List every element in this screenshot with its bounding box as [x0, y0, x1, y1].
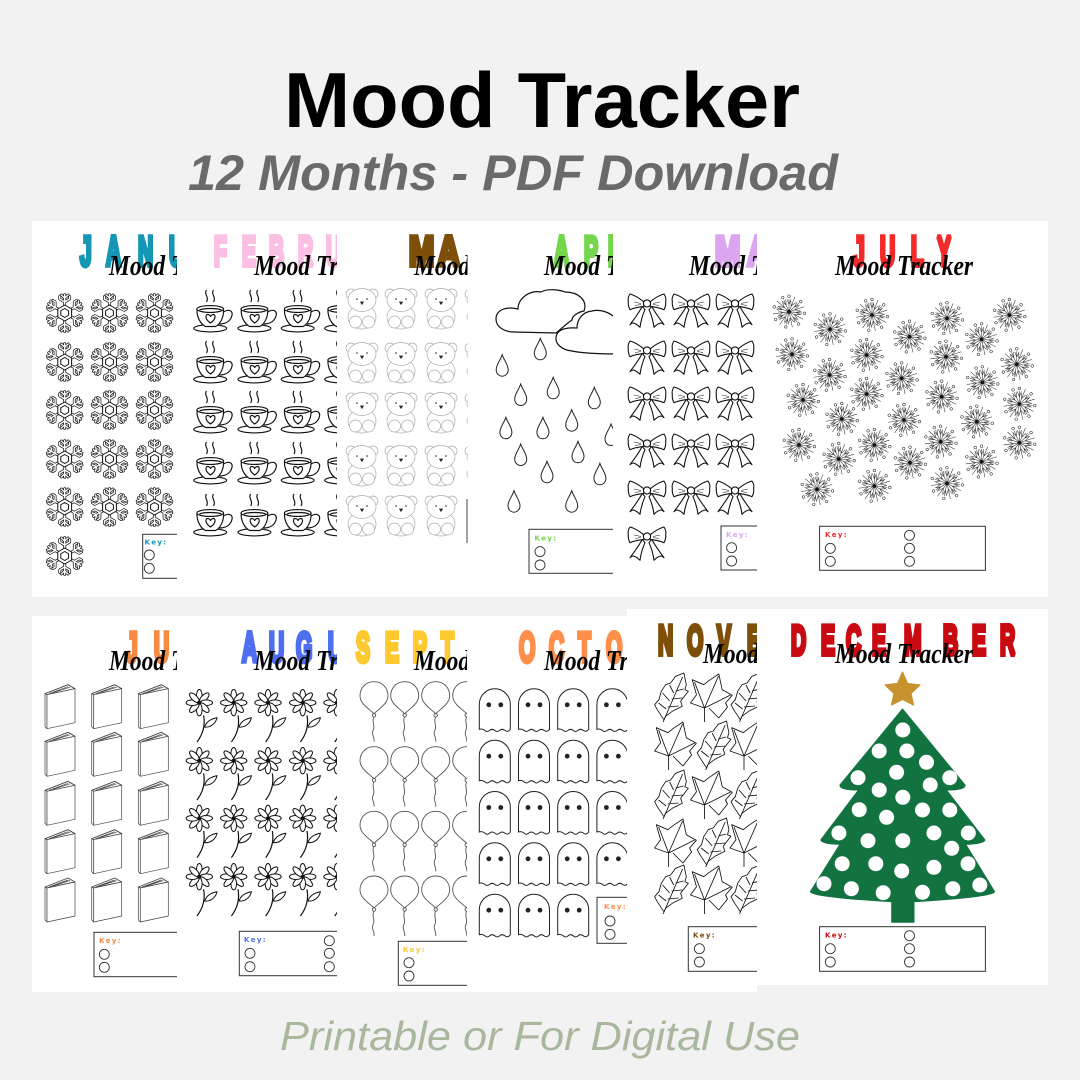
script title: Mood Tracker: [253, 251, 393, 282]
key box: Key:: [144, 538, 168, 546]
icons: balloons: [360, 682, 481, 936]
panel: June: [44, 630, 177, 978]
key box: Key:: [604, 903, 627, 911]
heading: October: OCTOBER: [519, 625, 710, 672]
panel: September: [355, 630, 467, 986]
footer tagline: Printable or For Digital Use: [280, 1013, 800, 1059]
heading: August: AUGUST: [242, 625, 403, 672]
icons: snowflakes: [46, 294, 173, 574]
panel: January: [46, 234, 177, 579]
title: Mood Tracker: [284, 56, 800, 144]
script title: Mood Tracker: [108, 251, 248, 282]
key box: [688, 927, 854, 971]
heading: June: JUNE: [126, 625, 227, 672]
icons: flowers: [186, 690, 355, 916]
script title: Mood Tracker: [834, 639, 974, 670]
key box: Key:: [693, 932, 716, 940]
icons: fireworks: [772, 295, 1036, 506]
illustration: Christmas tree: [810, 709, 995, 922]
icons: teddy bears: [346, 288, 468, 536]
key box: [94, 932, 177, 978]
heading: November: NOVEMBER: [658, 618, 880, 665]
panel: March: [346, 234, 468, 543]
key box: [238, 930, 337, 976]
heading: May: MAY: [715, 228, 798, 275]
panel: August: [186, 630, 337, 976]
key box: [720, 526, 757, 570]
script title: Mood Tracker: [543, 251, 683, 282]
heading: January: JANUARY: [80, 229, 276, 276]
script title: Mood Tracker: [834, 251, 974, 282]
key box: Key:: [99, 937, 122, 945]
icons: coffee cups: [193, 290, 337, 536]
icons: books: [45, 685, 168, 922]
icons: clouds and raindrops: [496, 290, 617, 512]
panel: July: [772, 229, 1036, 570]
key box: [820, 526, 985, 570]
heading: February: FEBRUARY: [214, 229, 434, 276]
heading: September: SEPTEMBER: [356, 625, 595, 672]
icons: ghosts: [479, 689, 628, 937]
panel: May: [628, 234, 757, 570]
key box: [597, 897, 763, 943]
white sheet backgrounds: [32, 221, 1048, 992]
icons: leaves: [655, 673, 772, 914]
icons: bows: [628, 294, 754, 560]
script title: Mood Tracker: [413, 646, 553, 677]
heading: March: MARCH: [409, 228, 547, 275]
key box: [528, 528, 613, 574]
key box: [142, 534, 177, 579]
key box: Key:: [244, 936, 267, 944]
script title: Mood Tracker: [702, 639, 842, 670]
key box: Key:: [825, 531, 848, 539]
heading: December: DECEMBER: [791, 618, 1015, 665]
key box: Key:: [403, 946, 426, 954]
panel: October: [479, 625, 763, 943]
key box: [820, 927, 985, 971]
panel: December: [791, 618, 1015, 971]
panel: November: [655, 618, 880, 971]
key box edge: [466, 499, 468, 543]
heading: July: JULY: [853, 229, 951, 276]
key box: [398, 941, 564, 985]
panel: February: [193, 234, 337, 536]
heading: April: APRIL: [554, 229, 668, 276]
script title: Mood Tracker: [543, 646, 683, 677]
icon: star: [885, 672, 920, 705]
key box: Key:: [534, 534, 558, 542]
key box: Key:: [726, 531, 749, 539]
panel: April: [495, 234, 613, 574]
script title: Mood Tracker: [108, 646, 248, 677]
key box: Key:: [825, 932, 848, 940]
script title: Mood Tracker: [253, 646, 393, 677]
subtitle: 12 Months - PDF Download: [188, 145, 839, 201]
script title: Mood Tracker: [688, 251, 828, 282]
script title: Mood Tracker: [413, 251, 553, 282]
